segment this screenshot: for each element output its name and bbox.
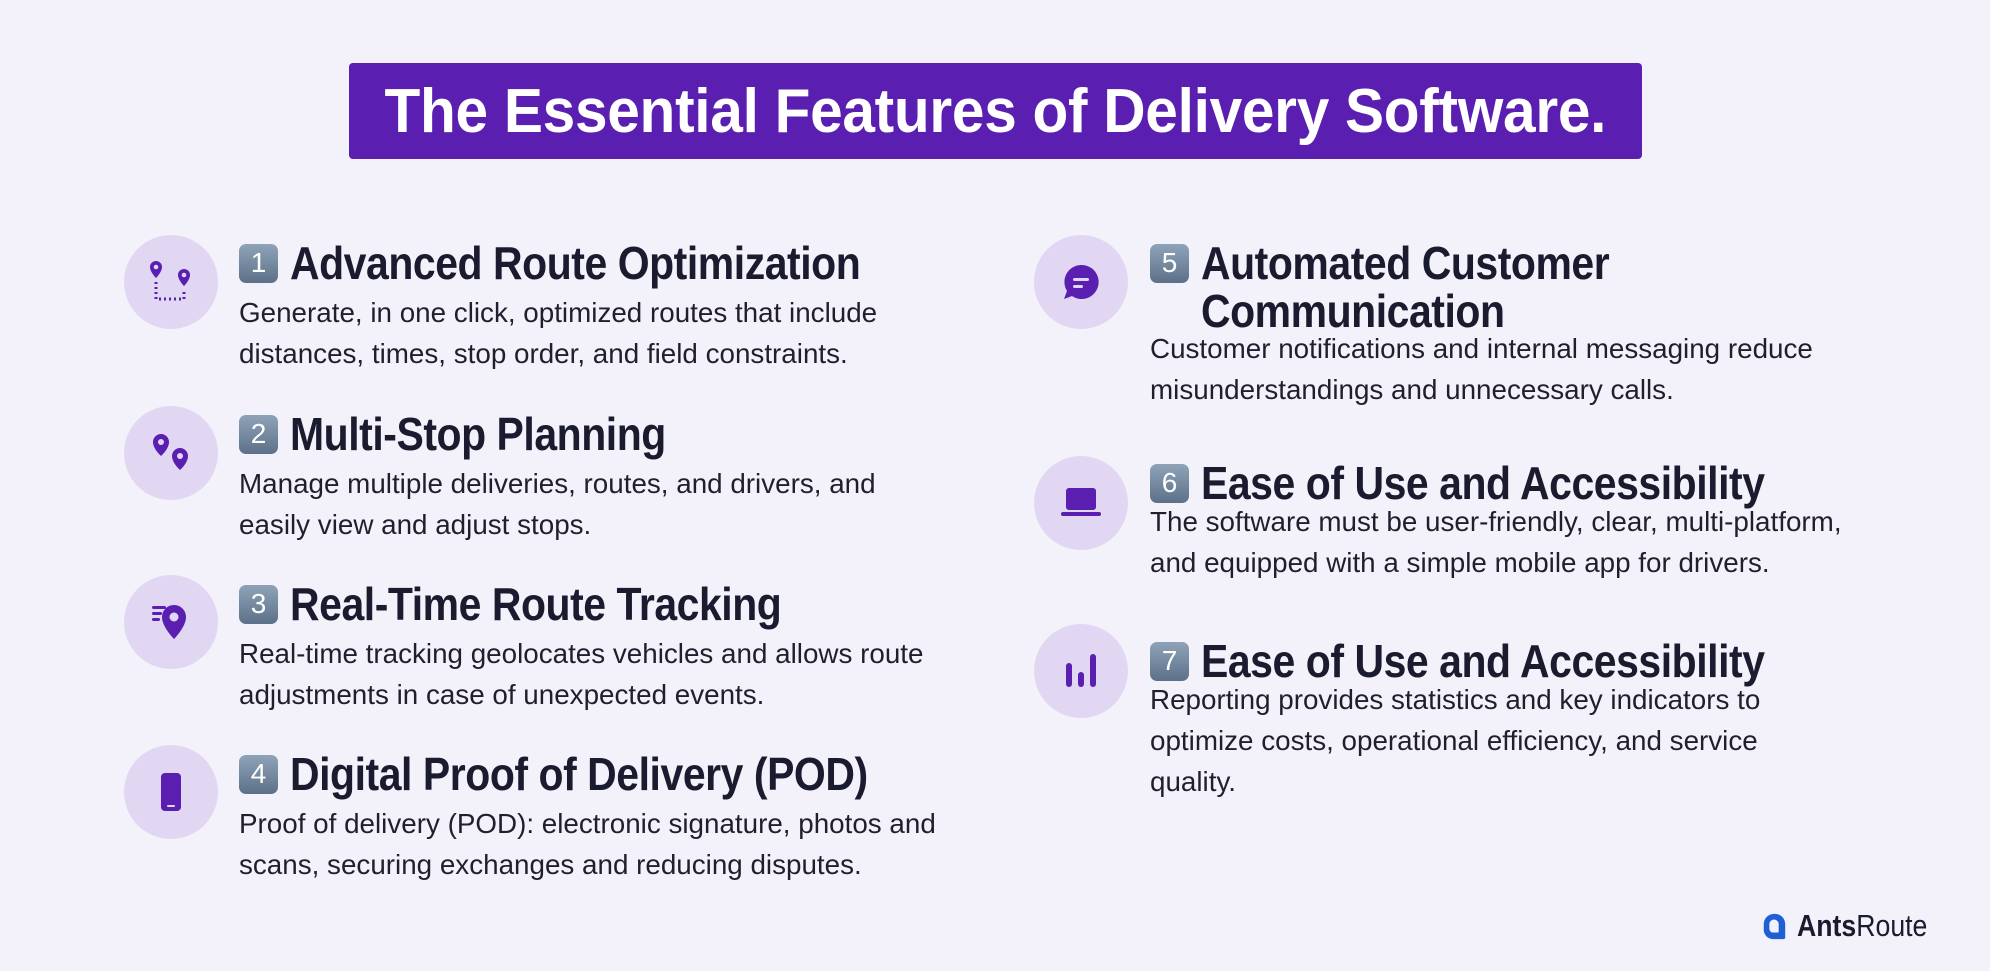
description: quality. bbox=[1150, 766, 1236, 797]
description: easily view and adjust stops. bbox=[239, 509, 591, 540]
heading: 5 bbox=[1162, 247, 1177, 278]
heading: 1 bbox=[251, 247, 266, 278]
heading: Advanced Route Optimization bbox=[290, 237, 860, 289]
description bbox=[239, 638, 923, 710]
icon: chat bubble bbox=[1034, 235, 1128, 329]
heading: 7 bbox=[1162, 645, 1177, 676]
icon: route pins bbox=[124, 235, 218, 329]
icon: laptop bbox=[1034, 456, 1128, 550]
item 5: Automated Customer Communication: Communication bbox=[1201, 285, 1505, 337]
item 3: Real-Time Route Tracking bbox=[124, 575, 923, 710]
description: adjustments in case of unexpected events. bbox=[239, 679, 764, 710]
item 6: Ease of Use and Accessibility bbox=[1034, 456, 1842, 578]
item 7: Reporting bbox=[1034, 624, 1765, 797]
heading: Ease of Use and Accessibility bbox=[1201, 457, 1765, 509]
description: scans, securing exchanges and reducing disputes. bbox=[239, 849, 862, 880]
title banner: The Essential Features of Delivery Software. bbox=[385, 76, 1606, 146]
description bbox=[239, 468, 876, 540]
heading: 6 bbox=[1162, 467, 1177, 498]
description bbox=[1150, 333, 1813, 405]
icon: two pins bbox=[124, 406, 218, 500]
heading: Automated Customer bbox=[1201, 237, 1609, 289]
description: Real-time tracking geolocates vehicles and allows route bbox=[239, 638, 923, 669]
description: optimize costs, operational efficiency, and service bbox=[1150, 725, 1758, 756]
icon: moving pin bbox=[124, 575, 218, 669]
description bbox=[1150, 506, 1842, 578]
item 2: Multi-Stop Planning bbox=[124, 406, 876, 540]
logo: AntsRoute: AntsRoute bbox=[1797, 908, 1927, 943]
description: Customer notifications and internal messaging reduce bbox=[1150, 333, 1813, 364]
description bbox=[239, 297, 877, 369]
description: Generate, in one click, optimized routes that include bbox=[239, 297, 877, 328]
description: The software must be user-friendly, clear, multi-platform, bbox=[1150, 506, 1842, 537]
title banner bbox=[349, 63, 1642, 159]
heading: Real-Time Route Tracking bbox=[290, 578, 781, 630]
heading: 3 bbox=[251, 588, 266, 619]
heading: Multi-Stop Planning bbox=[290, 408, 666, 460]
heading: 2 bbox=[251, 418, 266, 449]
item 4: Digital Proof of Delivery bbox=[124, 745, 936, 880]
item 1: Advanced Route Optimization bbox=[124, 235, 877, 369]
heading: 4 bbox=[251, 758, 266, 789]
description: Reporting provides statistics and key indicators to bbox=[1150, 684, 1760, 715]
description: misunderstandings and unnecessary calls. bbox=[1150, 374, 1674, 405]
heading: Digital Proof of Delivery (POD) bbox=[290, 748, 868, 800]
icon: phone bbox=[124, 745, 218, 839]
description: Manage multiple deliveries, routes, and drivers, and bbox=[239, 468, 876, 499]
description bbox=[239, 808, 936, 880]
description: distances, times, stop order, and field constraints. bbox=[239, 338, 848, 369]
heading: Ease of Use and Accessibility bbox=[1201, 635, 1765, 687]
item 5: Automated Customer Communication bbox=[1034, 235, 1813, 405]
description bbox=[1150, 684, 1760, 797]
description: and equipped with a simple mobile app for drivers. bbox=[1150, 547, 1770, 578]
icon: bar chart bbox=[1034, 624, 1128, 718]
description: Proof of delivery (POD): electronic signature, photos and bbox=[239, 808, 936, 839]
